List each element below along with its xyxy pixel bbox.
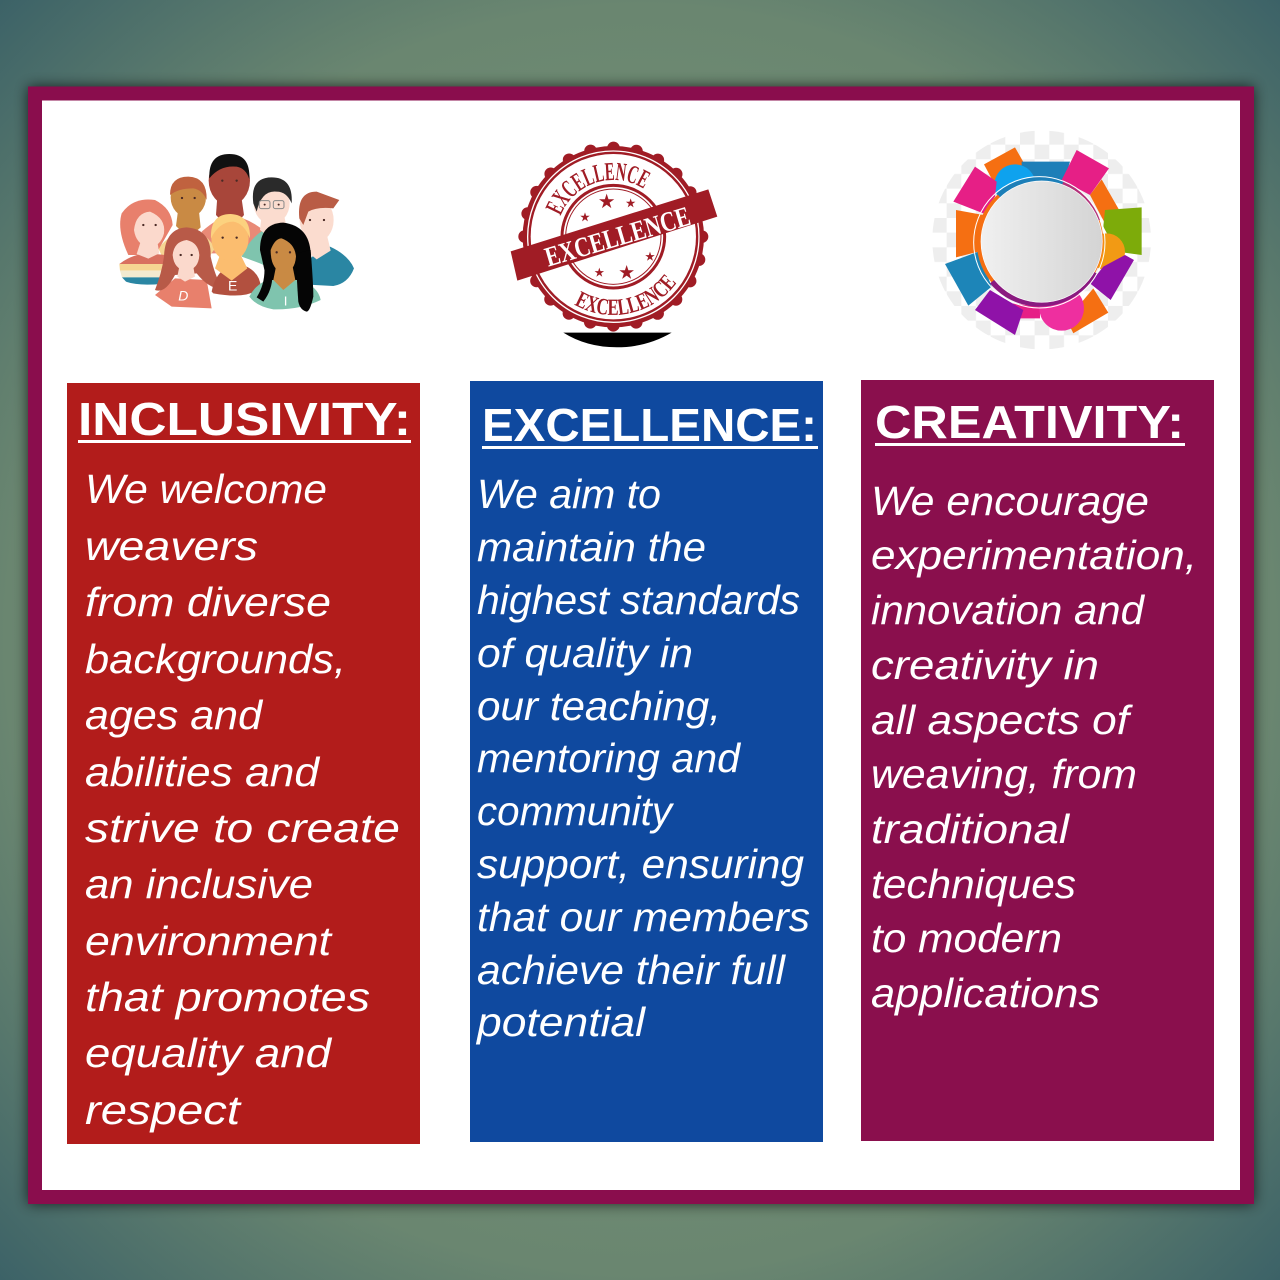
text: inclusivity description: strive to create bbox=[85, 805, 400, 851]
text: excellence description: highest standards bbox=[477, 577, 800, 623]
text: inclusivity description: weavers bbox=[85, 523, 258, 569]
shirt letters bbox=[178, 278, 287, 309]
person: red-haired man bbox=[292, 192, 354, 286]
person: blond man bbox=[211, 214, 261, 296]
text: excellence description: achieve their full bbox=[477, 947, 787, 993]
person: man with glasses bbox=[242, 177, 300, 280]
text: excellence description: mentoring and bbox=[477, 735, 741, 781]
text: creativity description: applications bbox=[871, 970, 1100, 1016]
text: creativity description: traditional bbox=[871, 806, 1071, 852]
text: creativity description: We encourage bbox=[871, 478, 1149, 524]
text: inclusivity description: environment bbox=[85, 918, 333, 964]
text: inclusivity description: from diverse bbox=[85, 579, 331, 625]
banner: EXCELLENCE bbox=[541, 201, 694, 274]
shirt letters: I bbox=[284, 294, 287, 309]
text: excellence description: community bbox=[477, 788, 674, 834]
text: creativity description: all aspects of bbox=[871, 697, 1133, 743]
text: inclusivity description: We welcome bbox=[85, 466, 327, 512]
text: creativity description: techniques bbox=[871, 861, 1076, 907]
text: inclusivity description: that promotes bbox=[85, 974, 370, 1020]
panel: inclusivity bbox=[67, 383, 420, 1144]
text: excellence description bbox=[475, 471, 810, 1045]
text: inclusivity description: an inclusive bbox=[85, 861, 313, 907]
text: creativity description bbox=[871, 478, 1197, 1016]
person: woman with long red hair bbox=[155, 227, 223, 308]
person: tan man bbox=[158, 177, 215, 270]
heading: creativity: CREATIVITY: bbox=[875, 396, 1184, 448]
icon: diverse group of people bbox=[119, 154, 354, 312]
heading: excellence: EXCELLENCE: bbox=[482, 399, 817, 451]
text: creativity description: to modern bbox=[871, 915, 1062, 961]
text: excellence description: support, ensuring bbox=[477, 841, 804, 887]
icon: colourful creativity badge bbox=[932, 131, 1151, 349]
text: creativity description: innovation and bbox=[871, 587, 1145, 633]
stars bbox=[580, 194, 655, 279]
text: inclusivity description: equality and bbox=[85, 1030, 332, 1076]
panel: excellence bbox=[470, 381, 823, 1142]
crescent shadow bbox=[563, 333, 672, 347]
text: inclusivity description: abilities and bbox=[85, 749, 320, 795]
text: creativity description: weaving, from bbox=[871, 751, 1137, 797]
text: inclusivity description bbox=[85, 466, 400, 1133]
text: excellence description: We aim to bbox=[477, 471, 661, 517]
grey disc bbox=[981, 181, 1102, 302]
person: woman in striped top bbox=[119, 199, 173, 285]
person: woman with long black hair bbox=[249, 223, 321, 312]
text: excellence description: maintain the bbox=[477, 524, 706, 570]
text: creativity description: experimentation, bbox=[871, 532, 1197, 578]
text: excellence description: our teaching, bbox=[477, 683, 721, 729]
icon: excellence stamp: EXCELLENCE bbox=[574, 274, 676, 315]
text: excellence description: of quality in bbox=[477, 630, 693, 676]
text: inclusivity description: backgrounds, bbox=[85, 636, 346, 682]
text: excellence description: that our members bbox=[477, 894, 810, 940]
scalloped seal bbox=[523, 146, 704, 327]
text: excellence description: potential bbox=[475, 999, 647, 1045]
icon: excellence stamp bbox=[510, 142, 718, 348]
panel: creativity bbox=[861, 380, 1214, 1141]
text: inclusivity description: ages and bbox=[85, 692, 263, 738]
inner ring bbox=[974, 177, 1105, 308]
text: creativity description: creativity in bbox=[871, 642, 1099, 688]
ring text: EXCELLENCE bbox=[545, 162, 651, 216]
checkered backdrop bbox=[932, 131, 1151, 349]
heading: inclusivity: INCLUSIVITY: bbox=[78, 393, 411, 445]
coloured shapes bbox=[945, 147, 1142, 335]
shirt letters: E bbox=[228, 278, 237, 294]
shirt letters: D bbox=[178, 288, 188, 304]
text: inclusivity description: respect bbox=[85, 1087, 242, 1133]
person: dark-skinned man bbox=[202, 154, 265, 253]
